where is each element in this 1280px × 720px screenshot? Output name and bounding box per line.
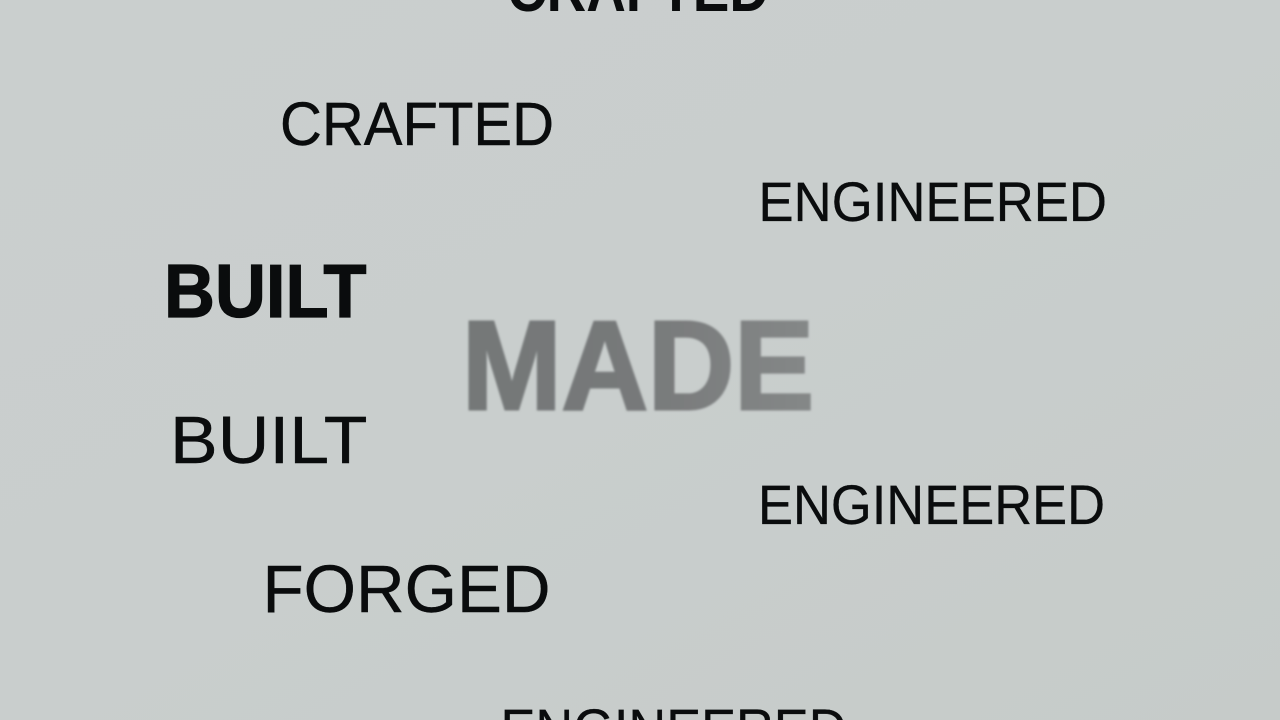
word: ENGINEERED lower: ENGINEERED xyxy=(758,473,1105,536)
word: MADE blurred centre: MADE xyxy=(462,295,814,436)
word: FORGED: FORGED xyxy=(262,552,550,627)
word: BUILT bold: BUILT xyxy=(164,249,366,333)
word: ENGINEERED upper: ENGINEERED xyxy=(758,170,1107,233)
word: BUILT: BUILT xyxy=(170,403,368,478)
word: CRAFTED: CRAFTED xyxy=(280,90,554,158)
